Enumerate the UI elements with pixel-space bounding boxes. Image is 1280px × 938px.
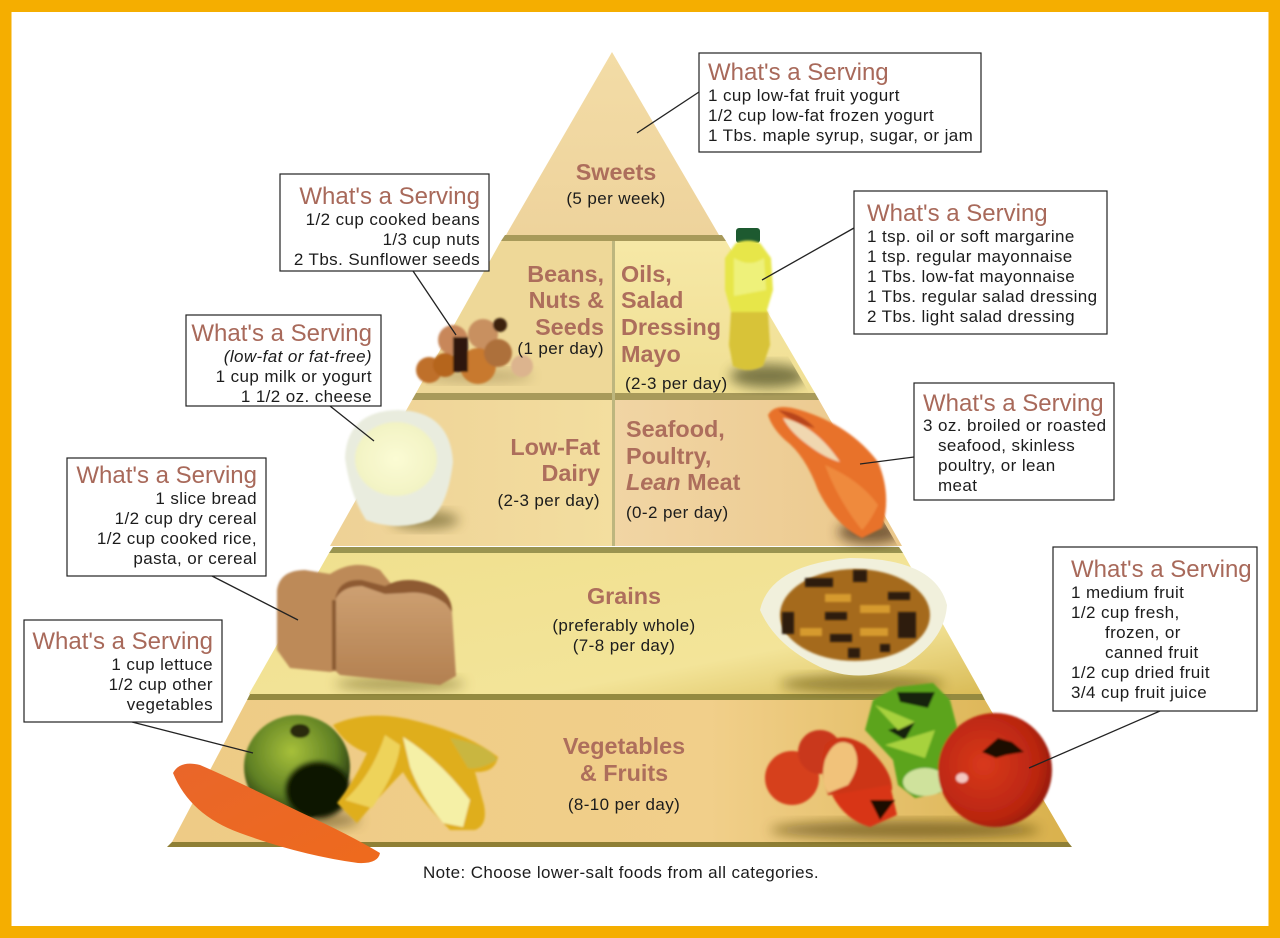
label: Oils, Salad Dressing Mayo: Salad [621,287,683,313]
callout: sweets serving: 1 Tbs. maple syrup, sugar, or jam [708,126,973,145]
label: Oils, Salad Dressing Mayo: Dressing [621,314,721,340]
callout: oils serving: 1 tsp. oil or soft margarine [867,227,1075,246]
callout: fruit serving: What's a Serving [1071,556,1252,583]
tier divider [412,393,819,400]
callout: grains serving: What's a Serving [76,462,257,489]
tier: oils, salad dressing, mayo [614,241,815,393]
callout: grains serving: 1/2 cup cooked rice, [97,529,257,548]
label: Low-Fat Dairy: Dairy [541,460,600,486]
tier divider [501,235,726,241]
tier: vegetables and fruits [172,700,1068,842]
callout: sweets serving [637,53,981,152]
label: Low-Fat Dairy [497,434,600,510]
callout: oils serving: 1 tsp. regular mayonnaise [867,247,1073,266]
callout: vegetables serving: What's a Serving [32,628,213,655]
label: Sweets: (5 per week) [566,189,666,208]
vertical split [612,241,615,546]
label: Beans, Nuts & Seeds: Seeds [535,314,604,340]
label: Seafood, Poultry, Lean Meat: (0-2 per day) [626,503,729,522]
callout: grains serving: 1 slice bread [155,489,257,508]
callout: oils serving: What's a Serving [867,200,1048,227]
label: Sweets [566,159,666,208]
callout: dairy serving: 1 1/2 oz. cheese [241,387,372,406]
callout: vegetables serving: 1/2 cup other [109,675,213,694]
icon: tomatoes, strawberries, lettuce [765,683,1052,827]
callout: beans serving: 2 Tbs. Sunflower seeds [294,250,480,269]
label: Oils, Salad Dressing Mayo: Mayo [621,341,681,367]
callout: fruit serving: 1/2 cup dried fruit [1071,663,1210,682]
label: Seafood, Poultry, Lean Meat: Seafood, [626,416,725,442]
callout: seafood serving [860,383,1114,500]
label: Grains: Grains [587,583,661,609]
label: Grains [552,583,696,655]
callout: beans serving: 1/3 cup nuts [383,230,480,249]
tier divider [329,547,903,553]
callout: grains serving: pasta, or cereal [133,549,257,568]
tomato [938,713,1052,827]
icon: salmon steak [768,407,886,538]
callout: dairy serving: What's a Serving [191,320,372,347]
lettuce [865,683,957,798]
callout: vegetables serving: vegetables [127,695,213,714]
label: Low-Fat Dairy: (2-3 per day) [497,491,600,510]
label: Beans, Nuts & Seeds: Nuts & [529,287,604,313]
icon: bread slices [277,565,456,685]
callout: oils serving [762,191,1107,334]
callout: beans serving: 1/2 cup cooked beans [306,210,480,229]
tier: sweets [506,52,719,235]
label: Seafood, Poultry, Lean Meat [626,416,741,522]
icon: bowl of cereal [760,558,947,676]
label: Seafood, Poultry, Lean Meat: Lean Meat [626,469,741,495]
tier divider [247,694,985,700]
label: Oils, Salad Dressing Mayo: Oils, [621,261,672,287]
icon: banana [333,716,498,830]
label: Vegetables & Fruits: & Fruits [580,760,668,786]
label: Grains: (7-8 per day) [573,636,675,655]
callout: fruit serving: frozen, or [1105,623,1181,642]
label: Beans, Nuts & Seeds [517,261,604,358]
icon: carrot [173,764,380,863]
callout: oils serving: 2 Tbs. light salad dressing [867,307,1075,326]
callout: fruit serving: canned fruit [1105,643,1199,662]
label: Beans, Nuts & Seeds: Beans, [527,261,604,287]
callout: seafood serving: meat [938,476,977,495]
label: Vegetables & Fruits [563,733,685,814]
tier: beans, nuts and seeds [416,241,614,393]
callout: beans serving [280,174,489,335]
callout: fruit serving: 3/4 cup fruit juice [1071,683,1207,702]
callout: grains serving: 1/2 cup dry cereal [115,509,257,528]
tier: grains [249,553,982,694]
icon: oil bottle [725,228,773,370]
strawberries [765,751,819,805]
label: Beans, Nuts & Seeds: (1 per day) [517,339,604,358]
label: Low-Fat Dairy: Low-Fat [510,434,600,460]
callout: sweets serving: What's a Serving [708,59,889,86]
label: Oils, Salad Dressing Mayo [621,261,728,393]
icon: glass of milk [345,410,453,526]
callout: vegetables serving: 1 cup lettuce [111,655,213,674]
label: Oils, Salad Dressing Mayo: (2-3 per day) [625,374,728,393]
callout: fruit serving: 1/2 cup fresh, [1071,603,1180,622]
callout: dairy serving: 1 cup milk or yogurt [216,367,372,386]
callout: seafood serving: seafood, skinless [938,436,1075,455]
callout: seafood serving: poultry, or lean [938,456,1056,475]
callout: vegetables serving [24,620,253,753]
callout: sweets serving: 1/2 cup low-fat frozen yogurt [708,106,934,125]
callout: fruit serving: 1 medium fruit [1071,583,1184,602]
callout: dairy serving [186,315,381,441]
callout: seafood serving: What's a Serving [923,390,1104,417]
label: Sweets: Sweets [576,159,656,185]
food shadows [260,364,1040,839]
note: Note: Choose lower-salt foods from all categories. [423,863,819,882]
label: Vegetables & Fruits: (8-10 per day) [568,795,680,814]
label: Seafood, Poultry, Lean Meat: Poultry, [626,443,711,469]
label: Vegetables & Fruits: Vegetables [563,733,685,759]
callout: seafood serving: 3 oz. broiled or roasted [923,416,1106,435]
label: Grains: (preferably whole) [552,616,696,635]
tier: low-fat dairy [330,400,614,546]
callout: beans serving: What's a Serving [299,183,480,210]
icon: nuts [416,318,533,384]
pyramid [167,52,1072,847]
callout: oils serving: 1 Tbs. low-fat mayonnaise [867,267,1075,286]
callout: grains serving [67,458,298,620]
callout: fruit serving [1029,547,1257,768]
base edge [167,842,1072,847]
icon: apple [244,715,350,819]
callout: dairy serving: (low-fat or fat-free) [224,347,372,366]
callout: oils serving: 1 Tbs. regular salad dressing [867,287,1098,306]
callout: sweets serving: 1 cup low-fat fruit yogurt [708,86,900,105]
tier: seafood, poultry, lean meat [614,400,902,546]
